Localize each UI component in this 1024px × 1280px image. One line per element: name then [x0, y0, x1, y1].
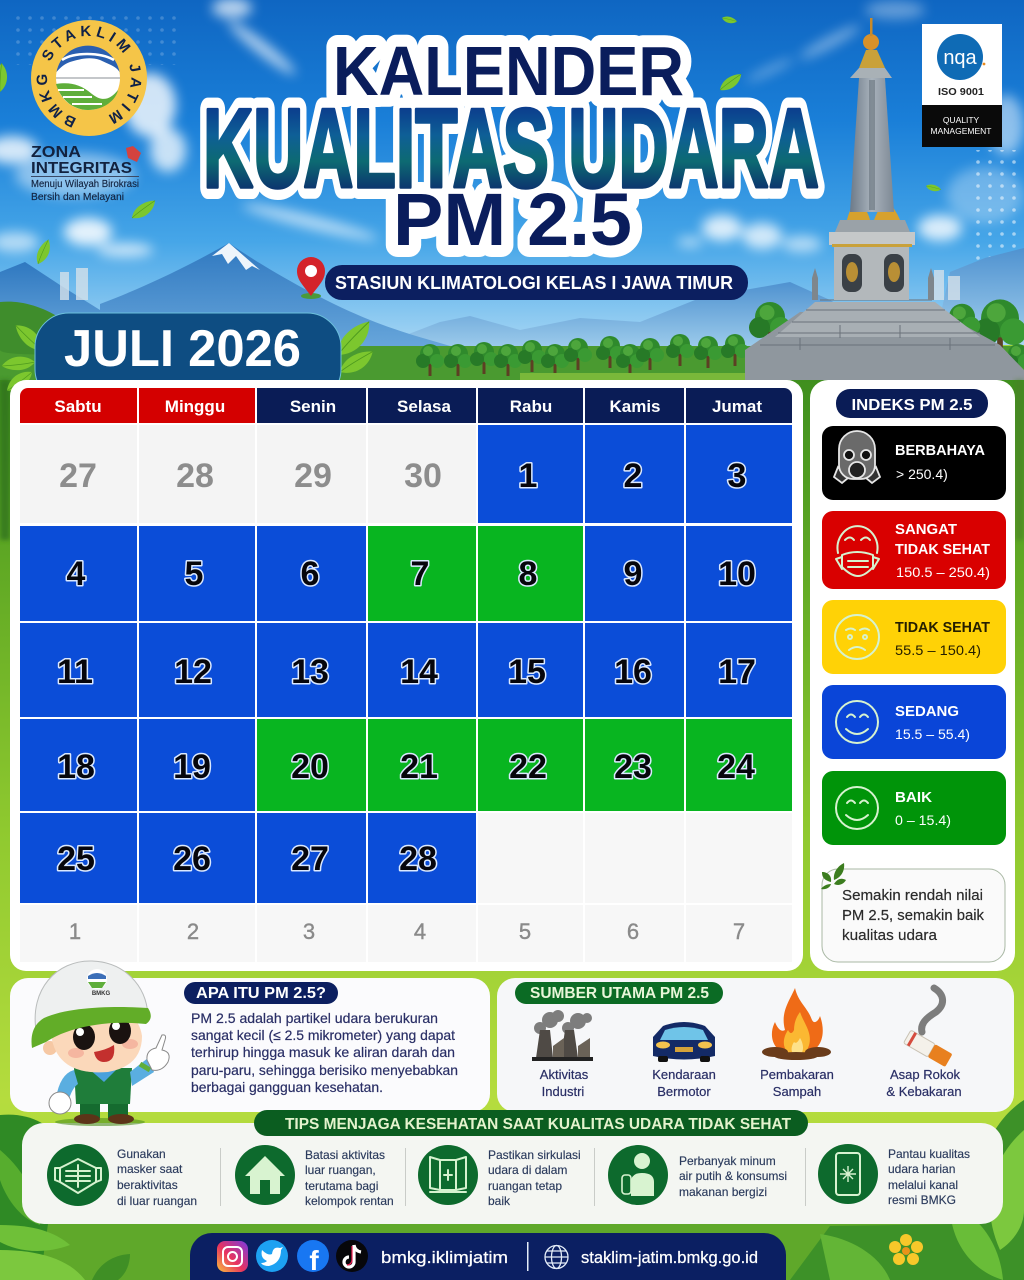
tip 1: mask: masker saat	[117, 1162, 183, 1176]
calendar dates: 23	[614, 748, 652, 786]
calendar dates: 20	[291, 748, 329, 786]
calendar dates: 6	[301, 555, 319, 593]
legend note	[821, 863, 1005, 962]
mascot head	[43, 1004, 142, 1072]
calendar dates: 2	[624, 457, 642, 495]
calendar dates: 12	[174, 653, 212, 691]
tip 3: window: baik	[488, 1194, 511, 1208]
calendar dates: 1	[69, 919, 81, 944]
icon: location pin	[297, 257, 325, 299]
calendar weekday header: Minggu	[165, 397, 225, 416]
calendar dates: 18	[57, 748, 95, 786]
station label: STASIUN KLIMATOLOGI KELAS I JAWA TIMUR	[335, 273, 733, 293]
legend note: PM 2.5, semakin baik	[842, 907, 984, 924]
tips heading: TIPS MENJAGA KESEHATAN SAAT KUALITAS UDARA TIDAK SEHAT	[285, 1116, 792, 1133]
legend: sedang	[822, 685, 1006, 759]
explanation text: paru-paru, sehingga berisiko menyebabkan	[191, 1062, 458, 1078]
calendar dates: 7	[411, 555, 429, 593]
icon: monument tower	[745, 18, 1024, 382]
calendar dates: 14	[400, 653, 438, 691]
mascot helmet	[32, 961, 151, 1048]
calendar dates: 25	[57, 840, 95, 878]
calendar dates: 30	[404, 457, 442, 495]
legend heading: INDEKS PM 2.5	[852, 397, 973, 414]
calendar dates: 28	[176, 457, 214, 495]
tips heading	[254, 1110, 808, 1136]
calendar dates: 19	[173, 748, 211, 786]
calendar dates: 3	[303, 919, 315, 944]
source: burning waste: Pembakaran	[760, 1067, 834, 1082]
tip 5: phone: udara harian	[888, 1162, 955, 1176]
tip 3: window	[418, 1145, 581, 1208]
tip 5: phone: melalui kanal	[888, 1178, 958, 1192]
logo: Zona Integritas: INTEGRITAS	[31, 160, 132, 177]
tip 3: window: Pastikan sirkulasi	[488, 1148, 581, 1162]
calendar dates: 2	[187, 919, 199, 944]
tip 1: mask: Gunakan	[117, 1147, 166, 1161]
legend: tidak sehat	[822, 600, 1006, 674]
tip 5: phone: Pantau kualitas	[888, 1147, 970, 1161]
panel: PM 2.5 index legend	[810, 380, 1015, 971]
calendar dates: 5	[519, 919, 531, 944]
legend: berbahaya: BERBAHAYA	[895, 442, 985, 459]
tip 2: house: luar ruangan,	[305, 1163, 376, 1177]
panel: what is PM 2.5	[10, 978, 490, 1112]
calendar dates: 4	[67, 555, 86, 593]
legend: baik	[822, 771, 1006, 845]
green lawn background	[0, 380, 1024, 1280]
source: industry	[532, 1010, 593, 1099]
station label	[297, 257, 748, 300]
calendar dates: 27	[291, 840, 329, 878]
mascot	[32, 961, 169, 1126]
legend: sangat tidak sehat: SANGAT	[895, 521, 957, 538]
legend: sangat tidak sehat	[822, 511, 1006, 589]
heading: sumber utama	[515, 982, 723, 1004]
tip 1: mask: beraktivitas	[117, 1178, 178, 1192]
legend: sedang: 15.5 – 55.4)	[895, 726, 970, 742]
calendar dates: 16	[614, 653, 652, 691]
mascot body	[56, 1058, 154, 1104]
source: vehicle	[652, 1022, 716, 1099]
icon: facebook	[297, 1240, 329, 1276]
mascot legs and boots	[74, 1098, 134, 1124]
calendar dates: 28	[399, 840, 437, 878]
mascot helmet: BMKG	[92, 991, 110, 997]
calendar weekday header: Senin	[290, 397, 336, 416]
icon: yellow flower	[889, 1234, 923, 1265]
legend: tidak sehat: 55.5 – 150.4)	[895, 642, 981, 658]
tip 1: mask	[47, 1144, 197, 1208]
tip 4: drinking water: Perbanyak minum	[679, 1154, 776, 1168]
tip 5: phone: resmi BMKG	[888, 1193, 956, 1207]
icon: facebook: f	[309, 1245, 319, 1276]
source: industry: Aktivitas	[540, 1067, 589, 1082]
legend: sedang: SEDANG	[895, 703, 959, 720]
badge: NQA ISO 9001: ISO 9001	[938, 87, 984, 98]
calendar dates: 1	[519, 457, 537, 495]
explanation text	[191, 1010, 458, 1095]
source: cigarette smoke: & Kebakaran	[886, 1084, 962, 1099]
calendar dates: 17	[718, 653, 756, 691]
legend: baik: 0 – 15.4)	[895, 812, 951, 828]
calendar dates: 11	[57, 653, 93, 691]
footer bar: bmkg.iklimjatim	[381, 1248, 508, 1267]
logo: Zona Integritas: ZONA	[31, 144, 81, 161]
legend: sangat tidak sehat: TIDAK SEHAT	[895, 541, 990, 558]
legend: berbahaya	[822, 426, 1006, 500]
footer bar: staklim-jatim.bmkg.go.id	[581, 1248, 758, 1267]
badge: NQA ISO 9001	[922, 24, 1002, 147]
calendar dates: 26	[173, 840, 211, 878]
calendar dates: 10	[718, 555, 756, 593]
legend: sangat tidak sehat: 150.5 – 250.4)	[896, 564, 990, 580]
source: industry: Industri	[542, 1084, 584, 1099]
icon: happy face	[836, 787, 878, 829]
corner foliage	[0, 1100, 1024, 1280]
title line 1: KALENDER	[333, 32, 684, 110]
legend note: Semakin rendah nilai	[842, 887, 983, 904]
tip 2: house	[235, 1145, 394, 1208]
tip 2: house: terutama bagi	[305, 1179, 378, 1193]
legend: baik: BAIK	[895, 789, 932, 806]
logo: Zona Integritas	[31, 144, 141, 203]
calendar dates: 15	[508, 653, 546, 691]
calendar weekday header: Selasa	[397, 397, 451, 416]
month banner	[1, 313, 378, 403]
calendar dates: 24	[717, 748, 755, 786]
source: cigarette smoke	[886, 988, 962, 1099]
mascot gloves	[49, 1035, 169, 1114]
legend note: kualitas udara	[842, 927, 938, 944]
source: cigarette smoke: Asap Rokok	[890, 1067, 961, 1082]
tip 3: window: ruangan tetap	[488, 1179, 562, 1193]
title block	[203, 32, 819, 261]
legend heading	[836, 389, 988, 418]
explanation text: PM 2.5 adalah partikel udara berukuran	[191, 1010, 438, 1026]
explanation text: berbagai gangguan kesehatan.	[191, 1079, 383, 1095]
logo: Zona Integritas: Menuju Wilayah Birokrasi	[31, 179, 139, 190]
badge: NQA ISO 9001: QUALITY	[943, 115, 980, 125]
calendar weekday header: Kamis	[609, 397, 661, 416]
calendar dates: 21	[400, 748, 438, 786]
logo: Zona Integritas: Bersih dan Melayani	[31, 192, 124, 203]
icon: globe	[545, 1246, 568, 1268]
calendar weekday header: Rabu	[510, 397, 552, 416]
tip 4: drinking water: air putih & konsumsi	[679, 1169, 787, 1183]
calendar dates: 6	[627, 919, 639, 944]
panel: health tips	[22, 1123, 1003, 1224]
legend: berbahaya: > 250.4)	[896, 466, 948, 482]
badge: NQA ISO 9001: MANAGEMENT	[931, 126, 991, 136]
tip 5: phone	[818, 1144, 970, 1207]
calendar dates: 9	[624, 555, 642, 593]
footer bar	[190, 1233, 786, 1280]
explanation text: sangat kecil (≤ 2.5 mikrometer) yang dapat	[191, 1027, 455, 1043]
tip 4: drinking water: makanan bergizi	[679, 1185, 767, 1199]
icon: face with mask	[836, 526, 879, 576]
source: burning waste: Sampah	[773, 1084, 821, 1099]
title line 3: PM 2.5	[393, 178, 632, 261]
source: burning waste	[760, 988, 834, 1099]
tip 2: house: Batasi aktivitas	[305, 1148, 385, 1162]
calendar dates: 13	[291, 653, 329, 691]
tip 3: window: udara di dalam	[488, 1163, 567, 1177]
icon: gas mask	[834, 431, 880, 483]
title white outline: KALENDER	[333, 32, 684, 110]
calendar dates	[57, 457, 756, 944]
tip 2: house: kelompok rentan	[305, 1194, 394, 1208]
calendar weekday header	[20, 388, 792, 423]
calendar dates: 3	[728, 457, 746, 495]
icon: tiktok	[336, 1240, 368, 1272]
legend: tidak sehat: TIDAK SEHAT	[895, 619, 990, 636]
badge: NQA ISO 9001: nqa	[943, 47, 978, 69]
calendar dates: 5	[185, 555, 203, 593]
calendar dates: 8	[519, 555, 537, 593]
calendar dates: 22	[509, 748, 547, 786]
calendar weekday header: Sabtu	[54, 397, 102, 416]
month banner: JULI 2026	[64, 320, 301, 378]
calendar dates: 7	[733, 919, 745, 944]
calendar weekday header: Jumat	[712, 397, 762, 416]
panel: main sources	[497, 978, 1014, 1112]
heading: sumber utama: SUMBER UTAMA PM 2.5	[530, 985, 709, 1002]
source: vehicle: Kendaraan	[652, 1067, 716, 1082]
source: vehicle: Bermotor	[657, 1084, 711, 1099]
floating leaves	[0, 13, 941, 266]
heading: apa itu pm 2.5: APA ITU PM 2.5?	[196, 985, 326, 1002]
tip 4: drinking water	[608, 1145, 787, 1205]
mountains and landscape	[0, 243, 1024, 386]
calendar dates: 29	[294, 457, 332, 495]
panel: calendar	[10, 380, 803, 971]
calendar grid cells	[20, 425, 792, 962]
icon: twitter	[256, 1240, 288, 1272]
heading: apa itu pm 2.5	[184, 982, 338, 1004]
icon: smiling face	[836, 701, 878, 743]
calendar dates: 4	[414, 919, 426, 944]
title white outline: PM 2.5	[393, 178, 632, 261]
title white outline	[203, 32, 819, 261]
tip 1: mask: di luar ruangan	[117, 1194, 197, 1208]
explanation text: terhirup hingga masuk ke aliran darah dan	[191, 1044, 455, 1060]
icon: instagram	[217, 1241, 248, 1272]
logo: BMKG Staklim Jatim: BMKG STAKLIM JATIM	[36, 26, 142, 128]
icon: worried face	[835, 615, 879, 659]
sky background	[0, 0, 1024, 345]
calendar dates: 27	[59, 457, 97, 495]
